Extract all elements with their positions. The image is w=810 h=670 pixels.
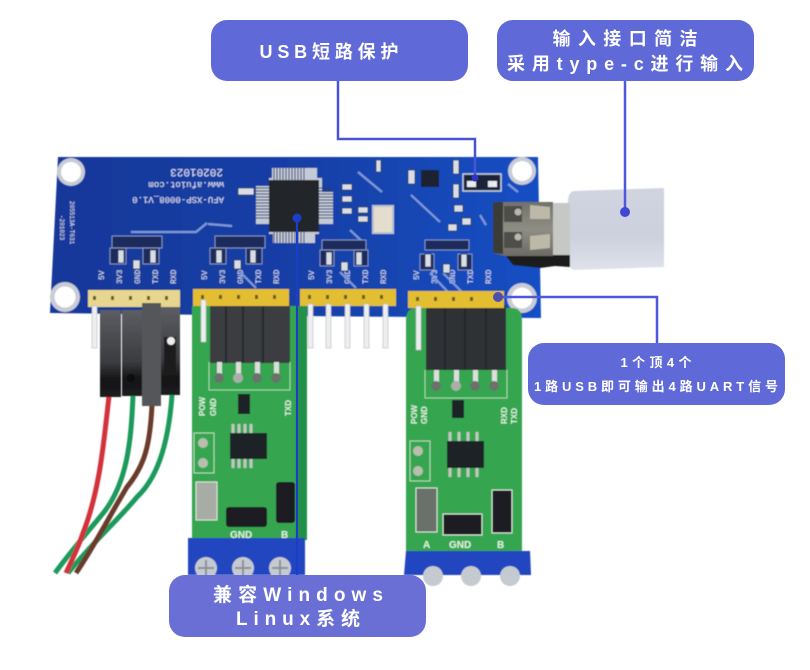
board traces and small components [131,172,518,292]
callout line: 1 to 4 [493,292,657,344]
green daughter board left: GND [209,398,218,416]
pin headers [88,289,504,308]
green daughter board left: GND [230,530,252,541]
board silkscreen text: RXD [273,269,282,284]
board silkscreen text: GND [449,269,458,284]
green daughter board right: GND [449,540,471,551]
board silkscreen text: 5V [308,270,317,280]
green daughter board right: GND [420,406,429,424]
terminal block left [188,538,305,579]
board silkscreen text: RXD [170,269,179,284]
board silkscreen text: 205513A-T631 [68,201,75,245]
board silkscreen text: GND [134,269,143,284]
straight header pins [92,300,421,350]
photo: USB to UART module assembly [50,157,664,586]
board silkscreen text: TXD [152,269,161,284]
board silkscreen text: 5V [413,270,422,280]
green daughter board right: RXD [500,407,509,424]
callout: compatible with Windows and Linux [169,575,426,637]
board silkscreen text: RXD [380,269,389,284]
green daughter board right: A [423,540,430,551]
callout: one replaces four [528,343,785,405]
board mounting holes [50,157,537,313]
callout line: USB short-circuit protection [338,80,478,182]
callout line: Windows Linux compatible [292,214,302,576]
green daughter board left [192,301,307,541]
board silkscreen text [58,165,494,284]
board silkscreen text: TXD [255,269,264,284]
dupont connectors [100,303,180,406]
callout: USB short-circuit protection: USB短路保护 [260,42,398,62]
terminal block right [404,551,531,586]
board silkscreen text: 5V [201,270,210,280]
callout: simple input via type-c: 采用type-c进行输入 [507,53,743,74]
green daughter board right: POW [410,404,419,424]
board silkscreen text: 3V3 [116,269,125,284]
callout: compatible with Windows and Linux: 兼容Windows [213,583,383,606]
LED clusters [110,236,472,270]
blue main board [50,157,541,318]
callout: one replaces four: 1个顶4个 [620,355,692,370]
green daughter board left: POW [198,396,207,416]
callout: simple input via type-c [497,20,754,81]
wires: four coloured jumper wires [55,395,172,573]
fuse footprint [463,174,501,191]
board silkscreen text: 5V [98,270,107,280]
board silkscreen text: 3V3 [326,269,335,284]
board silkscreen text: GND [237,269,246,284]
green daughter board right: TXD [510,408,519,424]
green daughter board right: B [497,540,504,551]
USB-C cable [568,188,664,270]
callout: one replaces four: 1路USB即可输出4路UART信号 [534,379,778,394]
callout: USB short-circuit protection [211,20,468,81]
microcontroller chip [256,168,333,243]
board silkscreen text: TXD [467,269,476,284]
green daughter board left: TXD [284,400,293,416]
white crystal component [373,206,393,233]
board silkscreen text: RXD [485,269,494,284]
USB-C connector [493,202,570,268]
board silkscreen text: -201023 [58,215,65,241]
board silkscreen text: 3V3 [219,269,228,284]
callout: simple input via type-c: 输入接口简洁 [552,28,698,49]
board silkscreen text: 20201023 [170,165,223,177]
board silkscreen text: 3V3 [431,269,440,284]
green daughter board right [406,305,522,552]
small regulator chip [421,170,439,187]
board silkscreen text: AFU-XSP-0008_V1.0 [132,194,224,204]
callout line: type-c input [620,80,630,217]
green daughter board left: B [281,530,288,541]
board silkscreen text: www.afuiot.com [148,179,224,189]
board silkscreen text: TXD [362,269,371,284]
board silkscreen text: GND [344,269,353,284]
callout: compatible with Windows and Linux: Linux系统 [236,607,360,630]
